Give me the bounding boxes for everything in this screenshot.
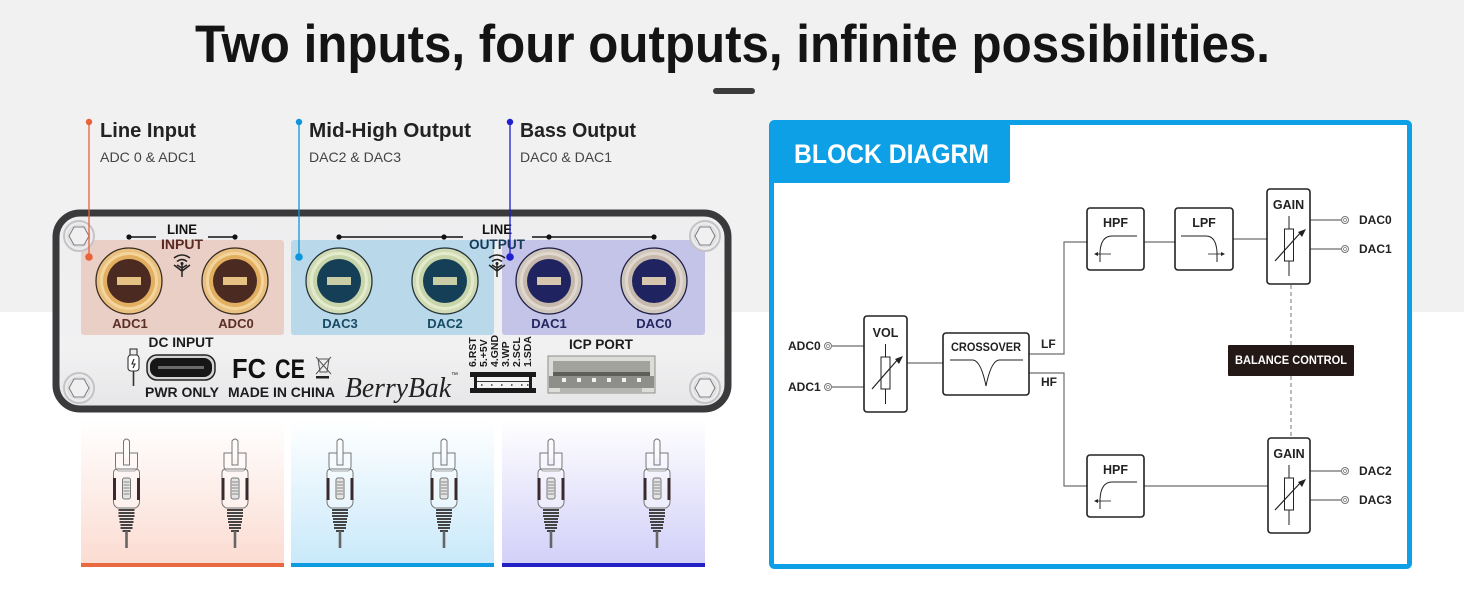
- heading: Bass Output: [520, 119, 636, 165]
- panel heading tab: [771, 122, 1010, 183]
- panel frame: [772, 122, 1410, 566]
- cable panel: bass output: [502, 420, 705, 567]
- jack DAC1: [516, 248, 582, 314]
- pin labels: [467, 334, 534, 367]
- pin labels: 5.+5V: [478, 339, 490, 367]
- screws: [64, 221, 720, 403]
- pin labels: 6.RST: [467, 337, 479, 367]
- jack labels: DAC2: [427, 316, 463, 331]
- output DAC2: [1342, 464, 1392, 478]
- cable panel: line input: [81, 420, 284, 567]
- block: VOL: VOL: [873, 326, 899, 340]
- block: crossover: [943, 333, 1029, 395]
- pin labels: 1.SDA: [522, 336, 534, 367]
- block: GAIN lower: [1268, 438, 1310, 533]
- icon: output antenna: [489, 255, 505, 277]
- icon: usb cable: [128, 349, 139, 386]
- label: line output: [336, 222, 657, 252]
- label: power only: PWR ONLY: [145, 385, 219, 400]
- heading: Line Input: ADC 0 & ADC1: [100, 149, 196, 165]
- block: LPF: [1175, 208, 1233, 270]
- output DAC1: DAC1: [1359, 242, 1392, 256]
- input ADC0: ADC0: [788, 339, 821, 353]
- signal wires: [832, 220, 1341, 500]
- label: line output: LINE: [482, 222, 512, 237]
- label: HF: HF: [1041, 375, 1057, 389]
- callout line: mid-high output: [295, 119, 303, 261]
- jack labels: DAC1: [531, 316, 567, 331]
- label: DC input: DC INPUT: [148, 335, 214, 350]
- cable panel: mid-high output: [291, 420, 494, 567]
- zone: mid-high output: [291, 240, 494, 335]
- block: VOL: [864, 316, 907, 412]
- certification marks: FC: [232, 353, 266, 384]
- block: crossover: CROSSOVER: [951, 340, 1021, 354]
- heading: Line Input: [100, 119, 196, 165]
- pin header: [470, 372, 536, 393]
- block: HPF lower: HPF: [1103, 463, 1128, 477]
- jack labels: ADC1: [112, 316, 148, 331]
- jack ADC0: [202, 248, 268, 314]
- jack DAC2: [412, 248, 478, 314]
- label: line input: INPUT: [161, 237, 204, 252]
- output DAC1: [1342, 242, 1392, 256]
- block: GAIN lower: GAIN: [1273, 447, 1305, 461]
- label: ICP port: ICP PORT: [569, 337, 634, 352]
- heading: Bass Output: DAC0 & DAC1: [520, 149, 612, 165]
- jack labels: [112, 316, 672, 331]
- heading: Mid-High Output: DAC2 & DAC3: [309, 149, 401, 165]
- certification marks: [232, 353, 331, 384]
- block: LPF: LPF: [1192, 216, 1216, 230]
- balance control label: BALANCE CONTROL: [1235, 355, 1347, 367]
- block: GAIN upper: [1267, 189, 1310, 284]
- icon: input antenna: [174, 255, 190, 277]
- label: line input: LINE: [167, 222, 197, 237]
- USB-C port: [147, 355, 215, 380]
- background: grey upper band: [0, 0, 1464, 312]
- heading: Mid-High Output: [309, 119, 471, 165]
- callout line: line input: [85, 119, 93, 261]
- heading: Bass Output: Bass Output: [520, 119, 636, 142]
- input ADC1: ADC1: [788, 380, 821, 394]
- pin labels: 3.WP: [500, 341, 512, 367]
- balance link dashed line: [1290, 285, 1292, 437]
- certification marks: CE: [275, 354, 305, 384]
- jack labels: DAC0: [636, 316, 672, 331]
- panel: block diagram: [771, 122, 1410, 566]
- label: line output: OUTPUT: [469, 237, 526, 252]
- jack ADC1: [96, 248, 162, 314]
- panel heading tab: BLOCK DIAGRM: [794, 139, 989, 169]
- pin labels: 4.GND: [489, 334, 501, 367]
- label: made in china: MADE IN CHINA: [228, 385, 335, 400]
- jack DAC0: [621, 248, 687, 314]
- logo: BerryBak: BerryBak: [345, 373, 452, 404]
- output DAC3: DAC3: [1359, 493, 1392, 507]
- callout line: bass output: [506, 119, 514, 261]
- jack labels: DAC3: [322, 316, 358, 331]
- pin labels: 2.SCL: [511, 337, 523, 367]
- heading: Line Input: Line Input: [100, 119, 196, 142]
- ICP connector: [548, 356, 655, 393]
- jack DAC3: [306, 248, 372, 314]
- heading: Mid-High Output: Mid-High Output: [309, 119, 471, 142]
- device rear panel: [56, 213, 728, 409]
- device enclosure: [56, 213, 728, 409]
- output DAC0: DAC0: [1359, 213, 1392, 227]
- output DAC3: [1342, 493, 1392, 507]
- jack labels: ADC0: [218, 316, 254, 331]
- title underline dash: [713, 88, 755, 94]
- zone: line input: [81, 240, 284, 335]
- block: GAIN upper: GAIN: [1273, 198, 1304, 212]
- block: HPF upper: HPF: [1103, 216, 1128, 230]
- zone: bass output: [502, 240, 705, 335]
- output DAC2: DAC2: [1359, 464, 1392, 478]
- label: LF: LF: [1041, 337, 1056, 351]
- block: HPF upper: [1087, 208, 1144, 270]
- label: line input: [126, 222, 238, 252]
- balance control label: [1228, 345, 1354, 376]
- block: HPF lower: [1087, 455, 1144, 517]
- output DAC0: [1342, 213, 1392, 227]
- title: Two inputs, four outputs, infinite possibilities.: [195, 15, 1270, 74]
- logo: BerryBak: ™: [451, 372, 458, 379]
